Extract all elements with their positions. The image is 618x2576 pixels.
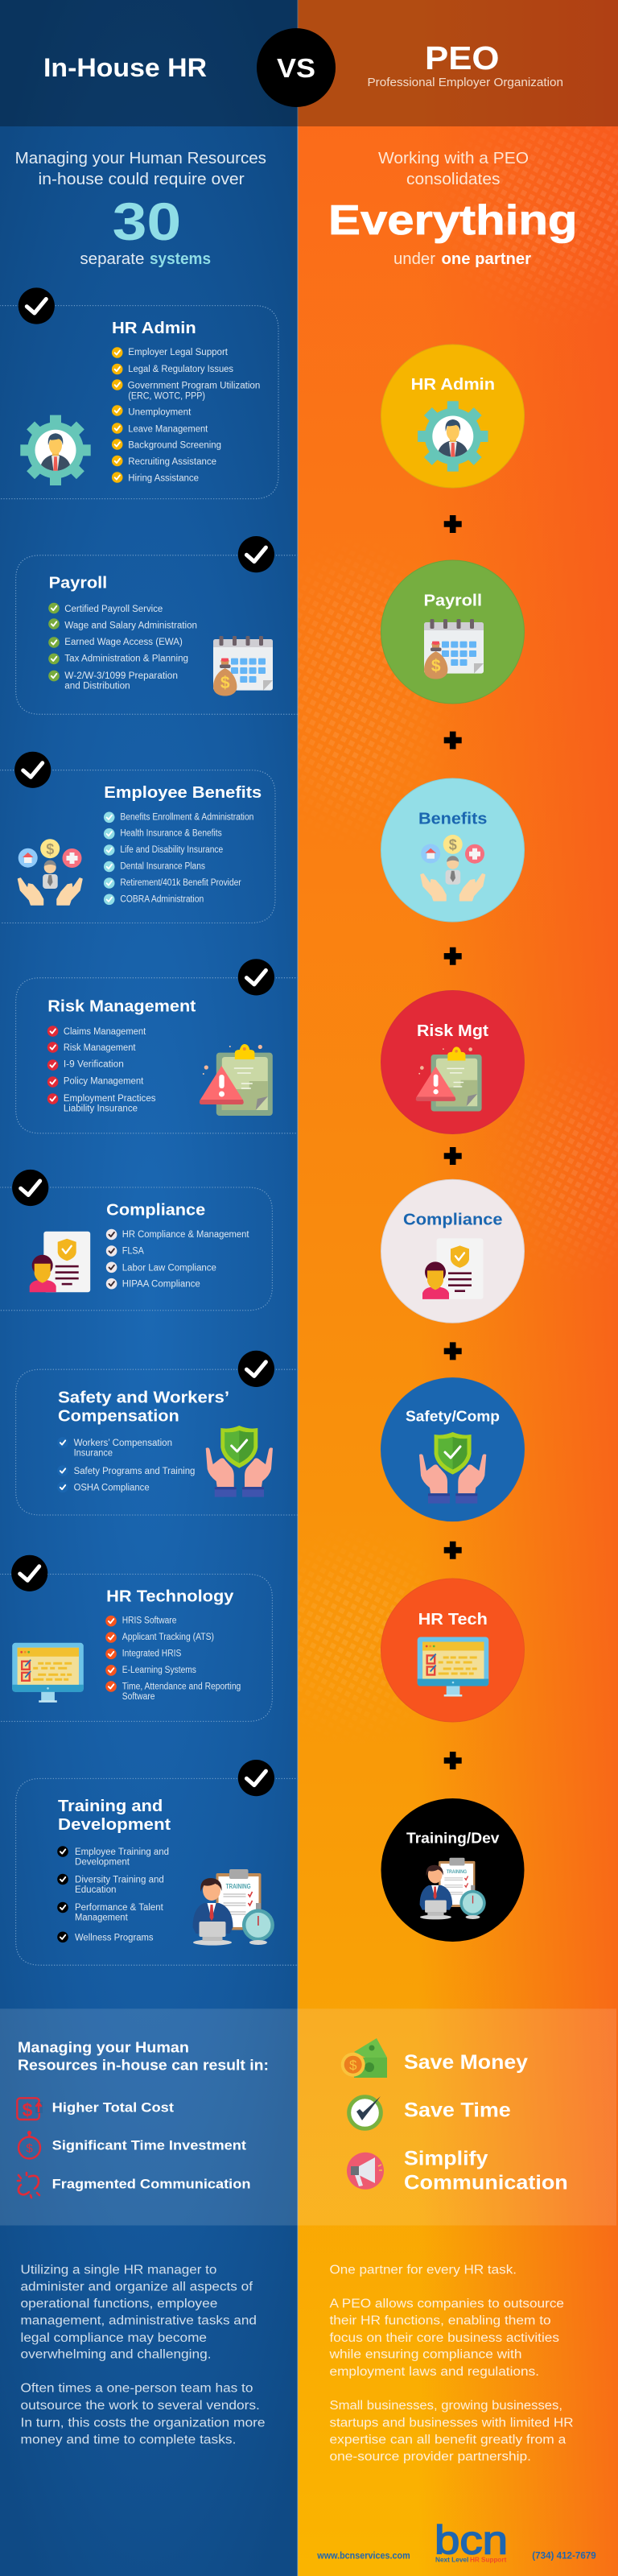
circle: HR Tech <box>381 1579 525 1722</box>
checklist: Life and Disability Insurance <box>120 845 223 855</box>
checklist <box>112 347 260 483</box>
checklist <box>106 1229 249 1290</box>
checklist: Benefits Enrollment & Administration <box>120 812 253 822</box>
label: Significant Time Investment <box>52 2137 246 2153</box>
plus <box>444 1752 462 1769</box>
checklist: Software <box>122 1692 154 1702</box>
background: in-house column <box>0 0 298 2576</box>
check badge <box>11 1555 47 1591</box>
icon: warning and clipboard <box>200 1044 273 1116</box>
checklist: Development <box>75 1858 130 1868</box>
checklist: Recruiting Assistance <box>128 457 216 467</box>
heading <box>58 1798 171 1834</box>
icon: time investment <box>19 2131 40 2159</box>
checklist: OSHA Compliance <box>74 1483 150 1492</box>
plus <box>444 1542 462 1559</box>
panel: Employee Benefits <box>0 752 275 923</box>
checklist: Wage and Salary Administration <box>64 621 197 630</box>
text block: PEO summary: their HR functions, enabling them to <box>330 2314 551 2328</box>
checklist: Performance & Talent <box>75 1903 164 1913</box>
icon: trainer with clipboard and stopwatch <box>193 1869 274 1946</box>
checklist: Retirement/401k Benefit Provider <box>120 878 241 888</box>
heading: Training and <box>58 1798 163 1815</box>
text block: PEO summary <box>328 2264 574 2464</box>
big number 30: 30 <box>113 192 181 251</box>
heading: Employee Benefits <box>104 784 262 802</box>
label: Fragmented Communication <box>52 2177 251 2192</box>
intro: in-house: in-house could require over <box>39 171 245 188</box>
text block: in-house summary: overwhelming and challenging. <box>21 2348 211 2362</box>
checklist: Employment Practices <box>64 1094 156 1104</box>
circle: Safety/Comp <box>381 1378 525 1521</box>
checklist <box>57 1846 169 1943</box>
heading <box>58 1389 229 1426</box>
text block: in-house summary: operational functions, employee <box>21 2297 217 2310</box>
checklist: Diversity Training and <box>75 1875 164 1885</box>
header band <box>0 0 618 126</box>
text block: in-house summary: Utilizing a single HR manager to <box>21 2264 216 2277</box>
checklist: and Distribution <box>64 681 130 691</box>
website: www.bcnservices.com <box>316 2552 410 2562</box>
circle: Training/Dev: Training/Dev <box>406 1830 499 1846</box>
checklist: E-Learning Systems <box>122 1666 196 1675</box>
checklist: Education <box>75 1885 116 1895</box>
checklist: Insurance <box>74 1449 113 1459</box>
icon: clock check <box>349 2096 381 2128</box>
label: Communication <box>404 2171 568 2194</box>
checklist: COBRA Administration <box>120 894 204 904</box>
checklist: I-9 Verification <box>64 1060 124 1070</box>
checklist: Health Insurance & Benefits <box>120 829 222 839</box>
text block: in-house summary: In turn, this costs the organization more <box>21 2416 266 2429</box>
text block: PEO summary: one-source provider partnership. <box>330 2450 531 2464</box>
intro: in-house: separate <box>80 250 144 268</box>
circle: HR Admin: HR Admin <box>411 376 495 394</box>
text block: in-house summary <box>21 2264 266 2447</box>
checklist <box>104 811 253 905</box>
panel: Training and Development <box>16 1760 298 1965</box>
check badge <box>14 752 51 788</box>
icon: higher cost <box>17 2098 43 2120</box>
check badge <box>238 959 274 995</box>
heading: HR Technology <box>106 1587 234 1605</box>
heading: Payroll <box>49 575 107 592</box>
checklist: Policy Management <box>64 1076 144 1086</box>
logo: HR Support <box>470 2555 506 2563</box>
checklist: Applicant Tracking (ATS) <box>122 1633 214 1642</box>
checklist: Integrated HRIS <box>122 1649 182 1658</box>
panel: HR Admin <box>0 287 278 499</box>
logo: bcn <box>435 2518 508 2563</box>
intro: in-house <box>15 150 266 268</box>
plus <box>444 732 462 749</box>
intro: PEO: consolidates <box>406 171 501 188</box>
checklist: Claims Management <box>64 1027 146 1037</box>
check badge <box>238 1760 274 1796</box>
checklist <box>105 1616 241 1702</box>
heading: HR Admin <box>112 320 196 337</box>
intro: PEO <box>328 150 578 268</box>
title: In-House HR: In-House HR <box>43 53 207 82</box>
VS badge: VS <box>277 53 315 83</box>
text block: PEO summary: employment laws and regulations. <box>330 2365 539 2379</box>
icon: money <box>341 2038 387 2078</box>
heading: Risk Management <box>47 997 196 1015</box>
heading: Development <box>58 1816 171 1834</box>
checklist: Employee Training and <box>75 1847 169 1857</box>
text block: in-house summary: Often times a one-person team has to <box>21 2382 253 2396</box>
circle: Payroll <box>381 560 525 704</box>
checklist <box>48 603 197 691</box>
panel: HR Technology <box>0 1555 272 1721</box>
checklist: Tax Administration & Planning <box>64 654 188 664</box>
icon: benefits hands <box>18 839 82 905</box>
text block: in-house summary: administer and organize all aspects of <box>21 2280 253 2293</box>
checklist: Workers’ Compensation <box>74 1439 172 1448</box>
icon: higher cost: $ <box>23 2099 33 2120</box>
panel: Safety and Workers' Compensation <box>16 1351 298 1515</box>
checklist: Wellness Programs <box>75 1934 154 1943</box>
text block: in-house summary: money and time to complete tasks. <box>21 2433 236 2447</box>
plus <box>444 1147 462 1165</box>
checklist: Dental Insurance Plans <box>120 861 205 871</box>
text block: PEO summary: expertise can all benefit greatly from a <box>330 2433 566 2447</box>
circle: Risk Mgt <box>381 990 525 1133</box>
checklist: Unemployment <box>128 408 192 418</box>
checklist <box>47 1026 156 1114</box>
icon: gear with manager <box>20 415 91 485</box>
checklist: Time, Attendance and Reporting <box>122 1682 241 1691</box>
icon: broken link <box>18 2173 39 2198</box>
circle: Safety/Comp: Safety/Comp <box>406 1409 500 1425</box>
panel: Risk Management <box>16 959 298 1133</box>
icon: time investment: $ <box>26 2141 33 2156</box>
panel: Payroll <box>16 536 298 714</box>
check badge <box>12 1170 48 1206</box>
subtitle: Professional Employer Organization <box>367 76 563 89</box>
circle: Compliance <box>381 1179 525 1323</box>
circle: HR Tech: HR Tech <box>418 1611 488 1629</box>
plus <box>444 1342 462 1360</box>
VS badge <box>257 28 336 107</box>
checklist: Government Program Utilization <box>128 381 260 390</box>
text block: PEO summary: startups and businesses with limited HR <box>330 2416 574 2429</box>
checklist: Hiring Assistance <box>128 473 199 483</box>
icon: monitor <box>12 1643 84 1703</box>
title: PEO: PEO <box>425 39 499 76</box>
checklist: Employer Legal Support <box>128 348 229 357</box>
checklist: Certified Payroll Service <box>64 605 163 614</box>
background: PEO column <box>297 0 618 2576</box>
checklist: Risk Management <box>64 1043 136 1053</box>
text block: PEO summary: Small businesses, growing businesses, <box>330 2399 562 2413</box>
plus <box>444 947 462 965</box>
intro: PEO: one partner <box>441 250 531 268</box>
heading: Compliance <box>106 1201 205 1219</box>
circle: Benefits: Benefits <box>418 811 487 828</box>
icon: calendar and money bag <box>213 636 273 696</box>
circle: HR Admin <box>381 345 525 488</box>
check badge <box>238 1351 274 1387</box>
checklist: (ERC, WOTC, PPP) <box>128 391 205 401</box>
outcomes band <box>0 2008 616 2225</box>
icon: shield in hands <box>206 1426 273 1497</box>
heading: in-house results <box>18 2039 269 2073</box>
label <box>404 2147 568 2194</box>
check badge <box>238 536 274 572</box>
circle: Compliance: Compliance <box>403 1212 502 1229</box>
checklist: W-2/W-3/1099 Preparation <box>64 671 178 681</box>
checklist: Background Screening <box>128 441 221 451</box>
checklist: FLSA <box>122 1246 144 1256</box>
heading: Safety and Workers’ <box>58 1389 229 1406</box>
intro: in-house: Managing your Human Resources <box>15 150 266 167</box>
heading: in-house results: Resources in-house can result in: <box>18 2057 269 2073</box>
logo: Next Level <box>435 2555 468 2563</box>
text block: PEO summary: A PEO allows companies to outsource <box>330 2297 564 2310</box>
text block: in-house summary: management, administrative tasks and <box>21 2314 257 2328</box>
label: Simplify <box>404 2147 488 2169</box>
checklist <box>57 1437 195 1492</box>
circle: Payroll: Payroll <box>423 592 482 610</box>
checklist: HR Compliance & Management <box>122 1230 249 1240</box>
heading: Compensation <box>58 1408 179 1426</box>
checklist: Legal & Regulatory Issues <box>128 365 233 374</box>
checklist: Safety Programs and Training <box>74 1467 195 1476</box>
text block: PEO summary: while ensuring compliance with <box>328 2348 521 2362</box>
icon: compliance document <box>30 1232 90 1292</box>
label: Save Time <box>404 2099 511 2121</box>
plus <box>444 515 462 533</box>
intro: in-house: systems <box>150 250 211 268</box>
circle: Benefits <box>381 778 525 922</box>
checklist: Liability Insurance <box>64 1104 138 1114</box>
label: Higher Total Cost <box>52 2100 174 2116</box>
icon: megaphone <box>347 2153 384 2190</box>
checklist: HRIS Software <box>122 1616 176 1626</box>
text block: in-house summary: legal compliance may become <box>21 2331 207 2345</box>
checklist: Management <box>75 1913 128 1923</box>
label: Save Money <box>404 2051 528 2074</box>
check badge <box>19 287 55 324</box>
checklist: Labor Law Compliance <box>122 1263 216 1273</box>
intro: PEO: Working with a PEO <box>378 150 529 167</box>
circle: Training/Dev <box>381 1798 525 1942</box>
phone: (734) 412-7679 <box>532 2552 596 2562</box>
text block: PEO summary: focus on their core business activities <box>330 2331 559 2345</box>
text block: PEO summary: One partner for every HR task. <box>330 2264 517 2277</box>
footer: contact and logo <box>316 2518 596 2563</box>
text block: in-house summary: outsource the work to several vendors. <box>21 2399 260 2413</box>
big word Everything: Everything <box>328 197 578 244</box>
intro: PEO: under <box>393 250 435 268</box>
checklist: HIPAA Compliance <box>122 1280 200 1290</box>
heading: in-house results: Managing your Human <box>18 2039 189 2055</box>
checklist: Earned Wage Access (EWA) <box>64 638 183 647</box>
panel: Compliance <box>0 1170 272 1311</box>
circle: Risk Mgt: Risk Mgt <box>417 1022 488 1040</box>
icon: money: $ <box>349 2058 357 2073</box>
checklist: Leave Management <box>128 424 208 434</box>
